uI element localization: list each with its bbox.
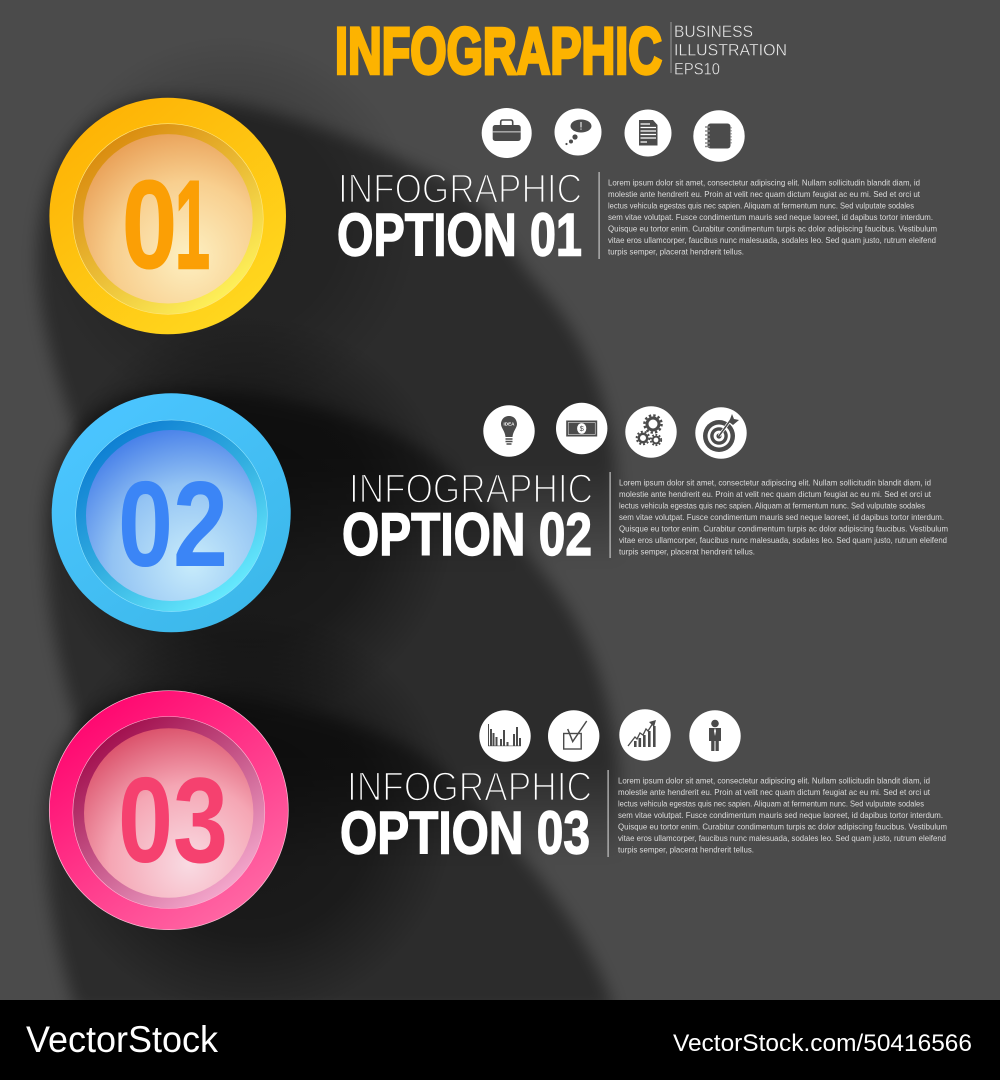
icon: light bulb: IDEA (504, 421, 515, 426)
title side caption (670, 22, 787, 78)
icon: banknote: $ (580, 424, 585, 433)
icon: gears (625, 406, 677, 458)
option 01 icons (482, 108, 745, 162)
option 02 divider (610, 472, 611, 558)
option 01 paragraph: Quisque eu tortor enim. Curabitur condimentum turpis ac dolor adipiscing faucibus. Vestibulum (608, 224, 937, 234)
option 03 paragraph: Lorem ipsum dolor sit amet, consectetur adipiscing elit. Nullam sollicitudin blandit diam, id (618, 776, 930, 786)
option 01 paragraph (608, 178, 937, 256)
option 03 paragraph: sem vitae volutpat. Fusce condimentum mauris sed neque laoreet, id dapibus tortor interdum. (618, 810, 943, 820)
title side caption: ILLUSTRATION (674, 42, 787, 60)
option 02 paragraph: sem vitae volutpat. Fusce condimentum mauris sed neque laoreet, id dapibus tortor interdum. (619, 512, 944, 522)
icon: light bulb (483, 405, 535, 457)
number 01: 0 (122, 156, 177, 295)
footer brand: VectorStock (26, 1019, 218, 1060)
option 01 paragraph: lectus vehicula egestas quis nec sapien. Aliquam at fermentum nunc. Sed vulputate sodales (608, 200, 914, 210)
icon: notebook (693, 110, 745, 162)
option 02 paragraph: turpis semper, placerat hendrerit tellus. (619, 546, 755, 556)
option 03 heading (340, 764, 592, 866)
option 01 paragraph: vitae eros ullamcorper, faucibus nunc malesuada, sodales leo. Sed quam justo, rutrum eleifend (608, 235, 936, 245)
option 02 paragraph: lectus vehicula egestas quis nec sapien. Aliquam at fermentum nunc. Sed vulputate sodales (619, 500, 925, 510)
option 01 paragraph: sem vitae volutpat. Fusce condimentum mauris sed neque laoreet, id dapibus tortor interdum. (608, 212, 933, 222)
main title: INFOGRAPHIC (335, 14, 662, 88)
footer bar (0, 1000, 1000, 1080)
icon: briefcase (482, 108, 532, 158)
option 02 circle (52, 393, 291, 632)
background swoosh shadows (38, 35, 622, 1020)
option 01 paragraph: turpis semper, placerat hendrerit tellus. (608, 246, 744, 256)
option 03 heading: INFOGRAPHIC (347, 764, 592, 810)
option 01 heading (337, 166, 582, 268)
option 02 paragraph: vitae eros ullamcorper, faucibus nunc malesuada, sodales leo. Sed quam justo, rutrum eleifend (619, 535, 947, 545)
option 01 divider (598, 172, 600, 259)
option 03 paragraph: Quisque eu tortor enim. Curabitur condimentum turpis ac dolor adipiscing faucibus. Vestibulum (618, 822, 947, 832)
footer image id: VectorStock.com/50416566 (673, 1030, 972, 1057)
option 03 icons (479, 709, 741, 762)
option 01 heading: OPTION 01 (337, 202, 582, 268)
option 02 paragraph: molestie ante hendrerit eu. Proin at velit nec quam dictum feugiat ac eu mi. Sed et orci ut (619, 489, 932, 499)
option 03 heading: OPTION 03 (340, 800, 590, 866)
option 03 paragraph: molestie ante hendrerit eu. Proin at velit nec quam dictum feugiat ac eu mi. Sed et orci ut (618, 787, 931, 797)
option 01 paragraph: molestie ante hendrerit eu. Proin at velit nec quam dictum feugiat ac eu mi. Sed et orci ut (608, 189, 921, 199)
option 02 paragraph: Lorem ipsum dolor sit amet, consectetur adipiscing elit. Nullam sollicitudin blandit diam, id (619, 478, 931, 488)
icon: document (624, 110, 672, 156)
option 01 heading: INFOGRAPHIC (338, 166, 582, 212)
option 03 paragraph (618, 776, 947, 854)
title side caption: EPS10 (674, 60, 720, 78)
icon: growth chart (619, 709, 671, 761)
option 03 paragraph: lectus vehicula egestas quis nec sapien. Aliquam at fermentum nunc. Sed vulputate sodales (618, 798, 924, 808)
icon: bar chart (479, 710, 531, 762)
icon: thought bubble (554, 108, 602, 156)
option 03 divider (608, 770, 609, 857)
title side caption: BUSINESS (674, 23, 753, 41)
number 02: 02 (118, 456, 228, 592)
option 02 icons (483, 403, 747, 459)
number 03: 03 (118, 752, 228, 888)
option 01 circle (49, 98, 286, 334)
option 02 heading (342, 466, 593, 568)
icon: businessman (689, 710, 741, 762)
option 01 paragraph: Lorem ipsum dolor sit amet, consectetur adipiscing elit. Nullam sollicitudin blandit diam, id (608, 178, 920, 188)
option 02 heading: INFOGRAPHIC (349, 466, 593, 512)
icon: target (695, 407, 747, 459)
icon: banknote (556, 403, 607, 454)
icon: checkbox (548, 710, 599, 762)
option 03 circle (49, 691, 288, 930)
option 03 paragraph: turpis semper, placerat hendrerit tellus. (618, 844, 754, 854)
option 03 paragraph: vitae eros ullamcorper, faucibus nunc malesuada, sodales leo. Sed quam justo, rutrum eleifend (618, 833, 946, 843)
number 01: 1 (175, 156, 210, 295)
option 02 heading: OPTION 02 (342, 501, 592, 568)
option 02 paragraph (619, 478, 948, 556)
option 02 paragraph: Quisque eu tortor enim. Curabitur condimentum turpis ac dolor adipiscing faucibus. Vestibulum (619, 524, 948, 534)
